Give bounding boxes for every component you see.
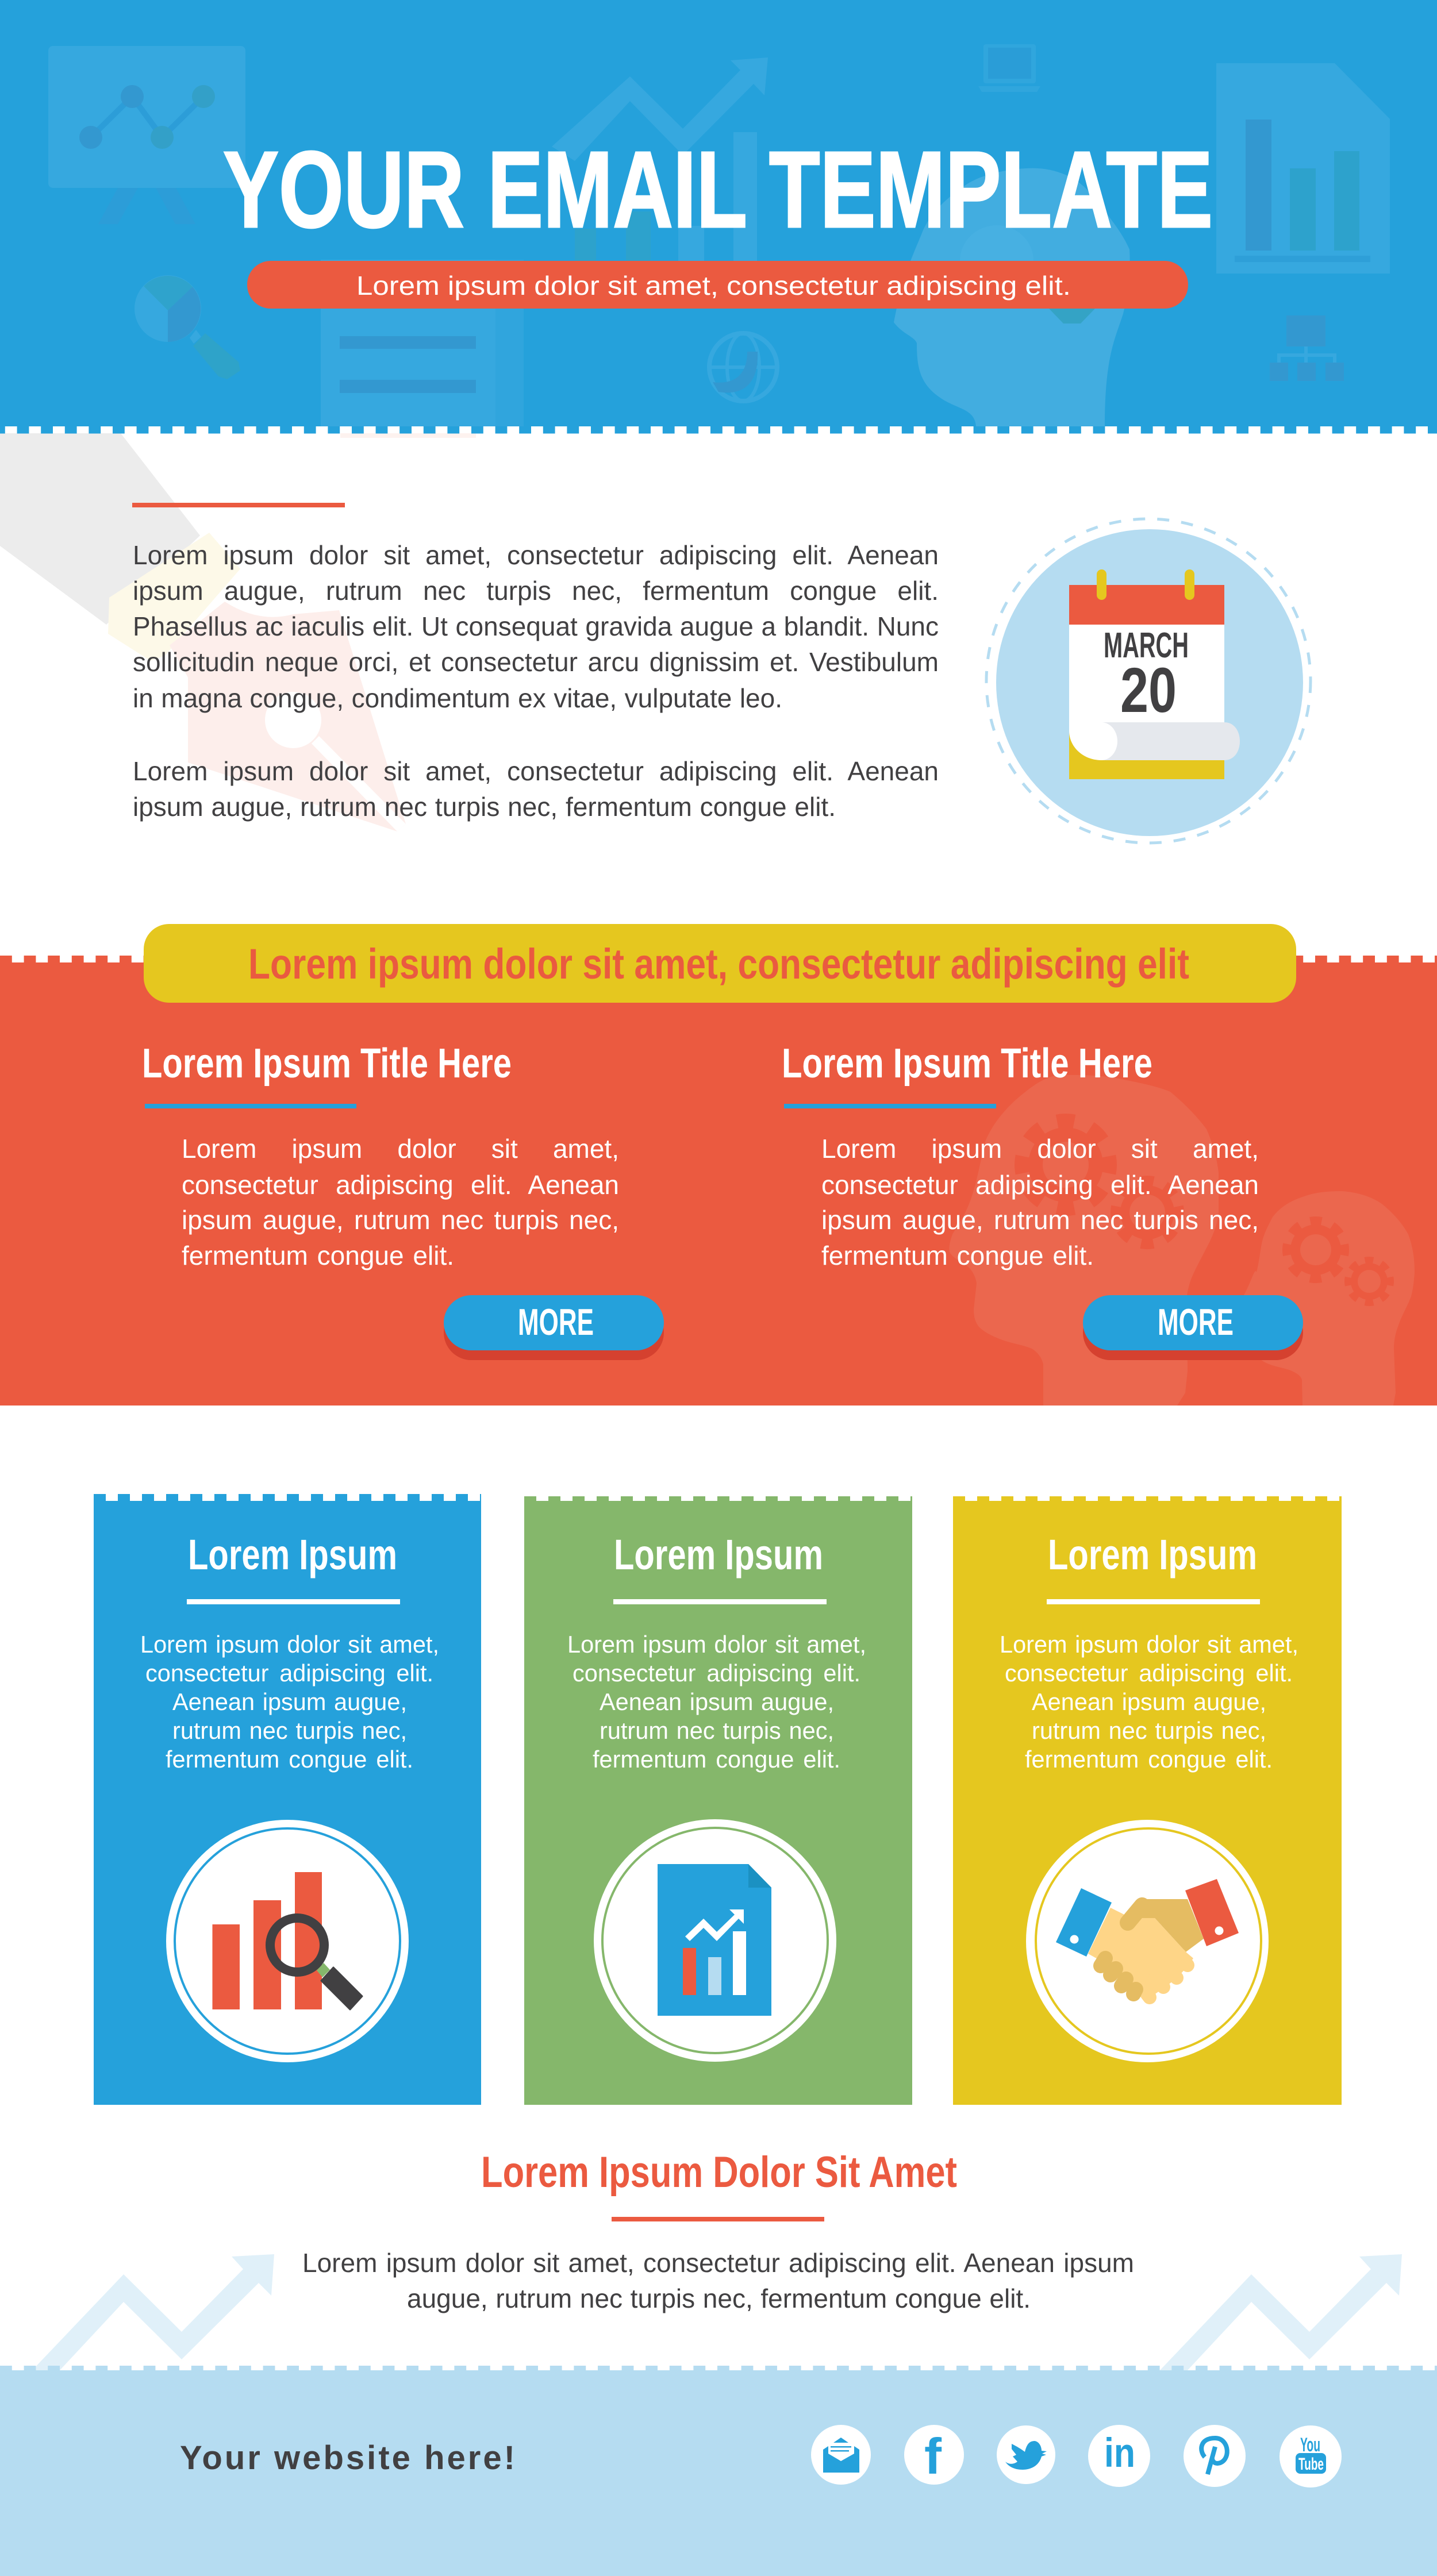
card: blue [94,1494,481,2105]
watermark: document with chart [1216,63,1390,274]
panel: closing message [36,2149,1402,2370]
accent rule [132,503,345,507]
panel: red feature section [0,924,1437,1406]
icon: youtube [1280,2425,1342,2488]
panel: footer [0,2366,1437,2576]
column 1 text: consectetur adipiscing elit. Aenean [182,1170,619,1200]
column 2 rule [784,1104,996,1108]
yellow banner: Lorem ipsum dolor sit amet, consectetur adipiscing elit [248,940,1189,988]
card text: Aenean ipsum augue, [1032,1688,1266,1715]
card rule [1047,1599,1260,1604]
card text: fermentum congue elit. [166,1746,413,1773]
icon: bar chart with magnifier [166,1820,409,2062]
card text: Lorem ipsum dolor sit amet, [1000,1631,1298,1658]
column 1 text [182,1134,619,1270]
intro paragraphs: Phasellus ac iaculis elit. Ut consequat gravida augue a blandit. Nunc [133,611,939,641]
card text: consectetur adipiscing elit. [1005,1659,1293,1686]
calendar badge [986,519,1311,843]
column 1 rule [145,1104,356,1108]
intro paragraphs: ipsum augue, rutrum nec turpis nec, fermentum congue elit. [133,576,939,606]
watermark: org chart [1270,315,1344,381]
watermark: phone [978,44,1040,92]
card title: Lorem Ipsum [614,1531,823,1578]
icon: handshake [1026,1820,1269,2062]
panel: intro text and calendar [0,433,1312,845]
watermark: head with gears right [1238,1191,1415,1406]
button 1: MORE [518,1301,594,1343]
card rule [613,1599,827,1604]
column 2 text: Lorem ipsum dolor sit amet, [821,1134,1259,1164]
section text: Lorem ipsum dolor sit amet, consectetur adipiscing elit. Aenean ipsum [302,2248,1134,2278]
card text: rutrum nec turpis nec, [172,1717,407,1744]
icon: pinterest [1184,2425,1246,2487]
watermark: head with gears [894,168,1130,426]
card text: consectetur adipiscing elit. [145,1659,433,1686]
card text [1000,1631,1298,1773]
button 2 [1083,1295,1303,1360]
icon: linkedin [1088,2425,1150,2487]
badge circle [996,529,1303,836]
subtitle pill: Lorem ipsum dolor sit amet, consectetur adipiscing elit. [356,271,1071,301]
card text: consectetur adipiscing elit. [573,1659,860,1686]
column 2 text: consectetur adipiscing elit. Aenean [821,1170,1259,1200]
card text: fermentum congue elit. [1025,1746,1273,1773]
intro paragraphs: in magna congue, condimentum ex vitae, vulputate leo. [133,683,782,713]
card text: Lorem ipsum dolor sit amet, [140,1631,439,1658]
button 1 [444,1295,664,1360]
day: 20 [1120,655,1177,726]
column 1 title: Lorem Ipsum Title Here [142,1041,512,1087]
watermark: globe [709,333,777,401]
section text [302,2248,1134,2313]
card text [140,1631,439,1773]
watermark: left arrow [32,2254,274,2370]
subtitle pill [247,261,1188,309]
icon: report document [594,1819,836,2062]
website text: Your website here! [180,2439,515,2477]
card text: fermentum congue elit. [593,1746,840,1773]
yellow banner [144,924,1296,1003]
button 2: MORE [1158,1301,1234,1343]
card text [567,1631,866,1773]
watermark: pen nib [0,433,476,831]
card text: rutrum nec turpis nec, [1032,1717,1266,1744]
card rule [187,1599,400,1604]
intro paragraphs [133,540,939,822]
icon: linkedin: in [1104,2431,1135,2476]
card title: Lorem Ipsum [1048,1531,1257,1578]
section heading: Lorem Ipsum Dolor Sit Amet [481,2149,957,2197]
card text: Aenean ipsum augue, [600,1688,834,1715]
dashed ring [986,519,1311,843]
column 1 text: Lorem ipsum dolor sit amet, [182,1134,619,1164]
intro paragraphs: sollicitudin neque orci, et consectetur arcu dignissim et. Vestibulum [133,647,939,677]
icon: twitter [997,2425,1055,2484]
icon: youtube: Tube [1298,2455,1324,2474]
column 2 text: ipsum augue, rutrum nec turpis nec, [821,1205,1259,1235]
card text: Aenean ipsum augue, [172,1688,407,1715]
intro paragraphs: Lorem ipsum dolor sit amet, consectetur adipiscing elit. Aenean [133,540,939,570]
watermark: document with lines [321,260,524,426]
card text: Lorem ipsum dolor sit amet, [567,1631,866,1658]
card: green [524,1496,912,2105]
column 1 text: fermentum congue elit. [182,1241,454,1270]
card text: rutrum nec turpis nec, [600,1717,834,1744]
calendar page [1069,731,1224,779]
column 1 text: ipsum augue, rutrum nec turpis nec, [182,1205,619,1235]
section text: augue, rutrum nec turpis nec, fermentum congue elit. [407,2284,1031,2313]
icon: facebook: f [924,2428,942,2485]
watermark: easel chart [48,46,245,224]
watermark: growth arrow and bars [552,57,768,261]
column 2 title: Lorem Ipsum Title Here [782,1041,1152,1087]
page curl [1101,722,1240,760]
month: MARCH [1104,626,1189,665]
column 2 text: fermentum congue elit. [821,1241,1094,1270]
icon: youtube: You [1300,2434,1320,2456]
watermark: right arrow [1160,2254,1402,2370]
panel: header [0,0,1437,433]
column 2 text [821,1134,1259,1270]
intro paragraphs: Lorem ipsum dolor sit amet, consectetur adipiscing elit. Aenean [133,756,939,786]
icon: facebook [904,2425,964,2485]
icon: email [811,2425,871,2485]
intro paragraphs: ipsum augue, rutrum nec turpis nec, fermentum congue elit. [133,792,836,822]
section rule [612,2217,824,2221]
card: yellow [953,1496,1342,2105]
watermark: head with gears left [949,1075,1219,1406]
watermark: pie and magnifier [135,275,240,379]
card title: Lorem Ipsum [188,1531,397,1578]
